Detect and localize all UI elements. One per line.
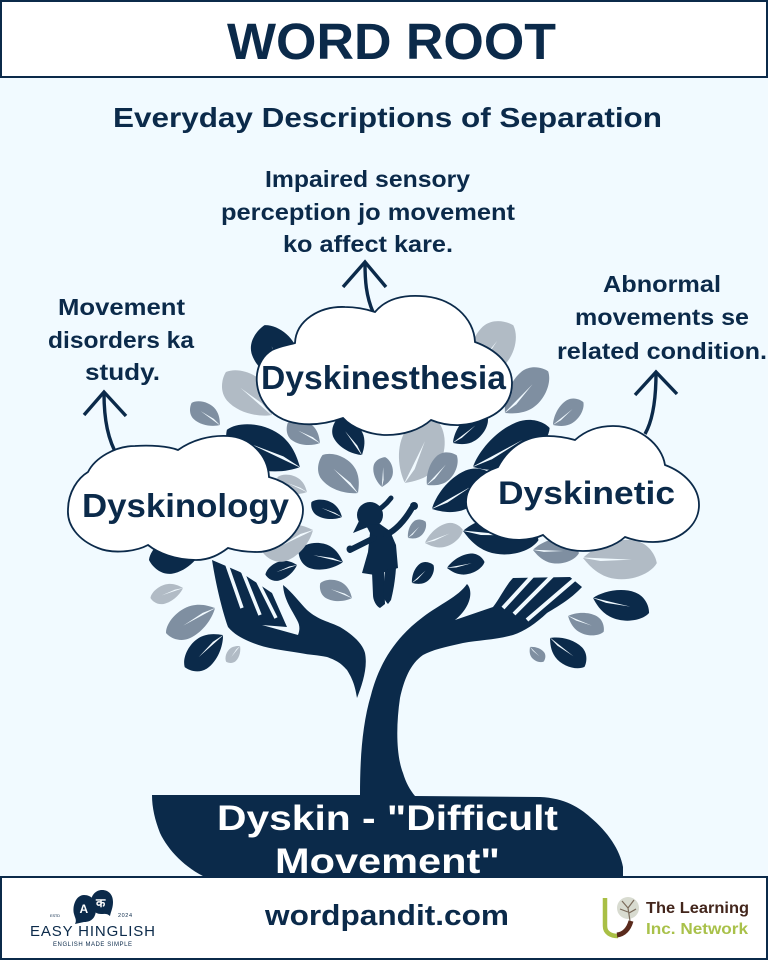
cloud label: Dyskinetic: Dyskinetic: [498, 475, 675, 511]
The Learning Inc. Network logo: [605, 897, 749, 938]
cloud label: Dyskinesthesia: Dyskinesthesia: [261, 359, 507, 396]
leaves canopy: [145, 311, 658, 679]
subtitle: Everyday Descriptions of Separation: [113, 102, 662, 133]
description: Dyskinesthesia: ko affect kare.: [283, 231, 453, 257]
arrow: Dyskinetic to description: [635, 372, 677, 434]
The Learning Inc. Network logo: Inc. Network: [646, 921, 748, 938]
description: Dyskinesthesia: Impaired sensory: [265, 166, 470, 192]
Easy Hinglish logo: क: [95, 896, 106, 910]
root label: [217, 799, 558, 881]
Easy Hinglish logo: [30, 890, 155, 948]
description: Dyskinetic: Abnormal: [603, 271, 721, 297]
Easy Hinglish logo: A: [80, 902, 88, 916]
footer bar: [1, 877, 767, 959]
cloud: Dyskinesthesia: [257, 296, 512, 435]
header bar: [1, 1, 767, 77]
Easy Hinglish logo: ENGLISH MADE SIMPLE: [53, 942, 132, 948]
child silhouette: [346, 498, 418, 608]
description: Dyskinology: [48, 294, 194, 385]
Easy Hinglish logo: ESTD: [50, 913, 60, 918]
description: Dyskinology: study.: [85, 359, 160, 385]
The Learning Inc. Network logo: The Learning: [646, 900, 749, 917]
title: WORD ROOT: [227, 13, 556, 70]
cloud label: Dyskinology: Dyskinology: [82, 487, 290, 524]
cloud: Dyskinology: [68, 436, 303, 560]
left hand: [212, 560, 366, 698]
arrow: Dyskinology to description: [84, 392, 126, 457]
website address: wordpandit.com: [264, 900, 509, 932]
arrow: Dyskinesthesia to description: [343, 262, 386, 312]
Easy Hinglish logo: 2024: [118, 913, 132, 919]
tree trunk, right hand and ground: [152, 572, 623, 878]
description: Dyskinology: disorders ka: [48, 327, 194, 353]
root label: Dyskin - "Difficult: [217, 799, 558, 838]
description: Dyskinesthesia: [221, 166, 515, 257]
description: Dyskinetic: related condition.: [557, 338, 767, 364]
description: Dyskinology: Movement: [58, 294, 185, 320]
description: Dyskinetic: movements se: [575, 304, 749, 330]
description: Dyskinetic: [557, 271, 767, 364]
root label: Movement": [275, 842, 500, 881]
Easy Hinglish logo: EASY HINGLISH: [30, 923, 155, 940]
cloud: Dyskinetic: [466, 426, 699, 551]
description: Dyskinesthesia: perception jo movement: [221, 199, 515, 225]
